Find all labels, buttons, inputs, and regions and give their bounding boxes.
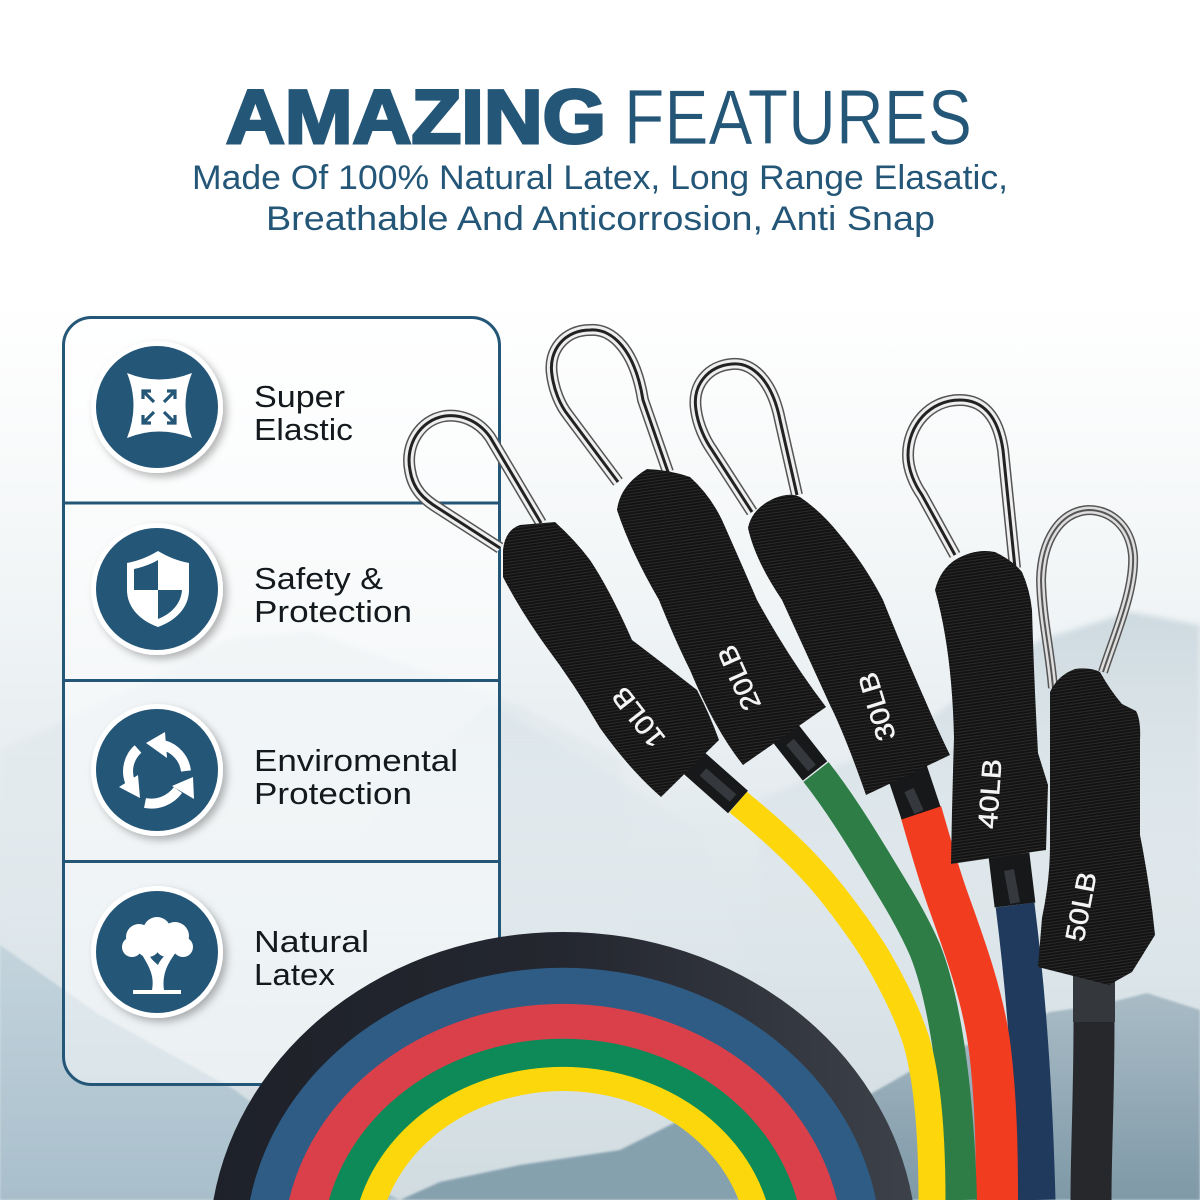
icon: stretch square [91, 341, 223, 473]
title word: AMAZING: AMAZING [226, 75, 606, 160]
label: super elastic: Elastic [254, 412, 353, 447]
feature: environmental protection [91, 704, 458, 836]
icon: tree [91, 886, 223, 1018]
subtitle: Made Of 100% Natural Latex, Long Range Elasatic, [192, 159, 1008, 197]
carabiner [409, 416, 541, 548]
product: 10LB handle [409, 416, 719, 797]
label: safety and protection: Safety & [254, 561, 383, 596]
carabiner [1041, 510, 1133, 688]
label: super elastic: Super [254, 379, 345, 414]
sleeve [503, 522, 719, 797]
carabiner [908, 400, 1015, 568]
product: 30LB handle [695, 364, 950, 795]
title [226, 73, 972, 161]
weight tag: 30LB [853, 669, 902, 744]
sleeve [748, 495, 950, 795]
carabiner [695, 364, 797, 512]
title word: FEATURES: FEATURES [624, 73, 972, 161]
feature: natural latex [91, 886, 369, 1018]
sleeve [935, 551, 1048, 864]
product: coiled resistance bands [213, 932, 913, 1200]
label: natural latex [254, 924, 369, 992]
subtitle [192, 159, 1008, 238]
icon: shield [91, 523, 223, 655]
weight tag: 50LB [1060, 869, 1103, 944]
weight tag: 20LB [712, 641, 767, 715]
label: super elastic [254, 379, 353, 447]
label: natural latex: Latex [254, 957, 336, 992]
sleeve [1038, 668, 1155, 985]
feature: super elastic [91, 341, 353, 473]
label: enviromental protection: Enviromental [254, 743, 458, 778]
icon: recycling arrows [91, 704, 223, 836]
label: enviromental protection [254, 743, 458, 811]
weight tag: 40LB [973, 758, 1008, 830]
carabiner [551, 330, 668, 482]
label: enviromental protection: Protection [254, 776, 412, 811]
product: 50LB handle [1038, 510, 1155, 985]
subtitle: Breathable And Anticorrosion, Anti Snap [266, 200, 935, 238]
product: 20LB handle [551, 330, 826, 765]
label: natural latex: Natural [254, 924, 369, 959]
sleeve [617, 469, 826, 765]
panel: features list [64, 318, 500, 1084]
label: safety and protection [254, 561, 412, 629]
label: safety and protection: Protection [254, 594, 412, 629]
product: 40LB handle [908, 400, 1048, 864]
product: straight tubes [685, 720, 1094, 1200]
feature: safety and protection [91, 523, 412, 655]
weight tag: 10LB [606, 681, 671, 753]
